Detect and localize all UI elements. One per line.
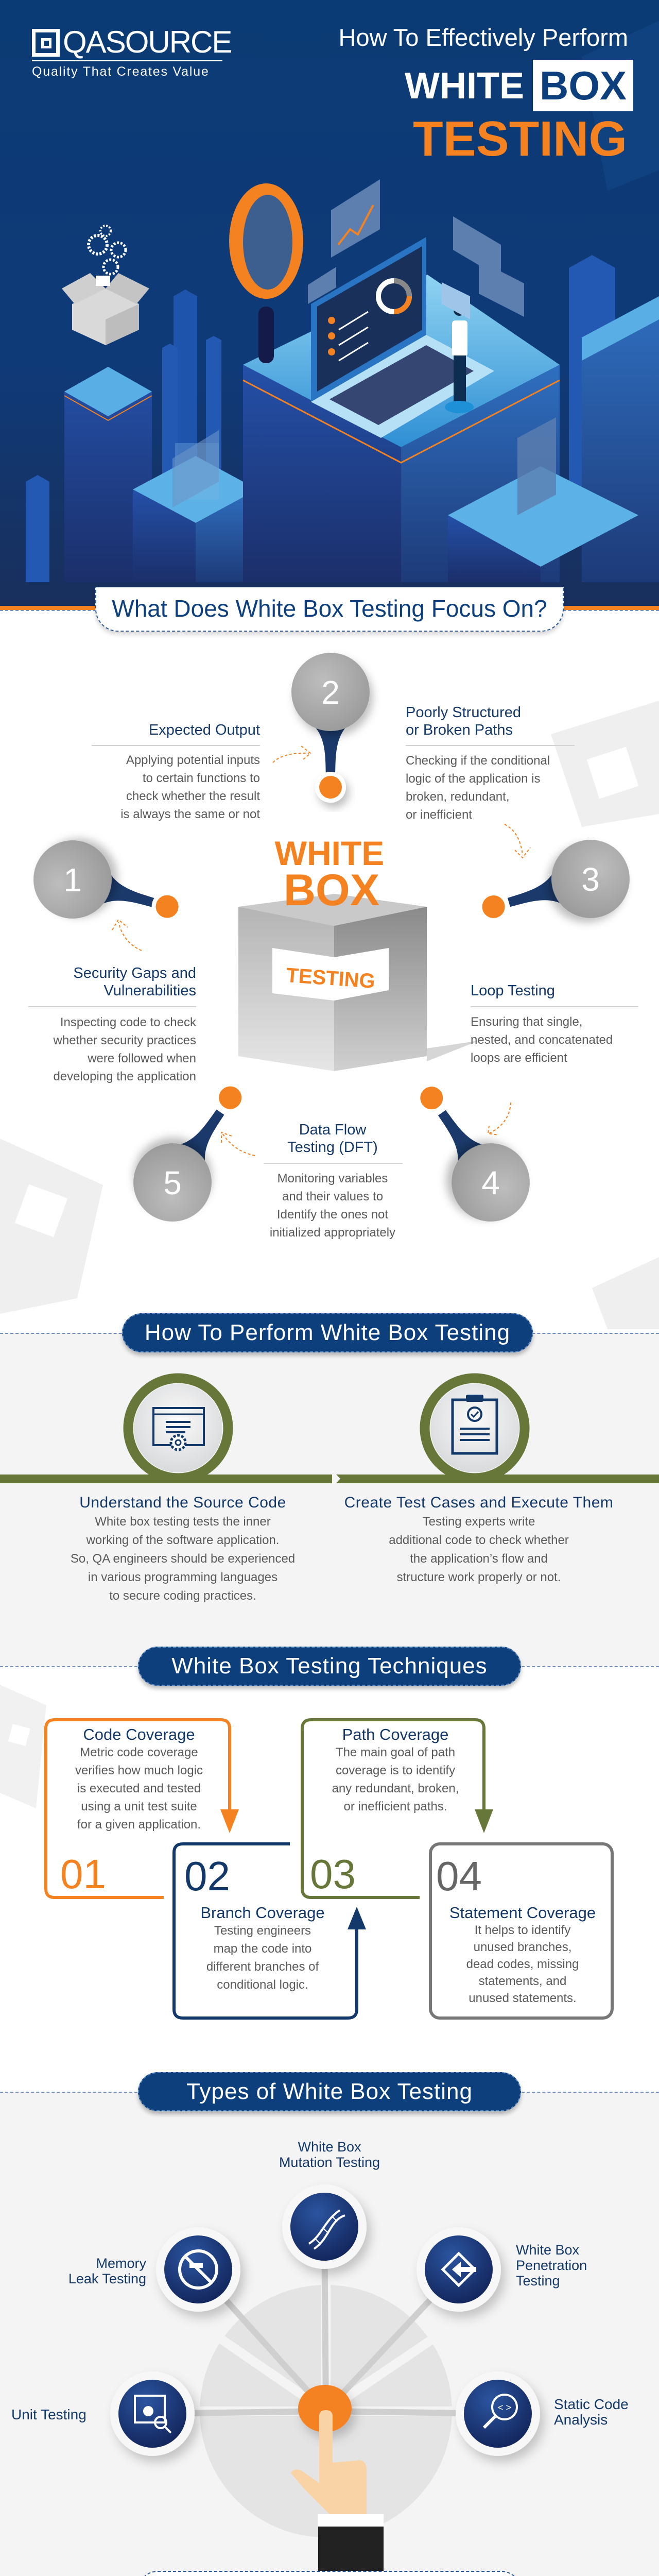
types background [0,2092,659,2576]
icon: memory leak [156,2227,240,2312]
text: Loop Testing: nested, and concatenated [471,1033,613,1047]
technique: Path Coverage: or inefficient paths. [343,1800,447,1814]
header banner [0,0,659,610]
text: Security Gaps: Inspecting code to check [60,1015,196,1029]
logo [32,25,231,79]
text: Data Flow Testing: and their values to [282,1190,383,1204]
watermarks [0,701,659,1329]
section: how to perform background [0,1333,659,1666]
text: Data Flow Testing: initialized appropriately [270,1226,395,1240]
text: Poorly Structured: broken, redundant, [406,790,509,804]
text: Loop Testing: loops are efficient [471,1051,567,1065]
text: Security Gaps [28,965,196,1083]
dashed arrows [112,746,530,1156]
technique: Path Coverage [310,1725,459,1897]
circle 4: 4 [481,1164,500,1201]
orange button with hand [291,2385,384,2573]
circle 1: 1 [63,861,82,899]
watermark left techniques [0,1685,46,1808]
technique: Path Coverage: Path Coverage [342,1725,448,1743]
technique: Code Coverage: Code Coverage [83,1725,195,1743]
label: penetration: Penetration [516,2258,587,2273]
text: Security Gaps: Security Gaps and [73,965,196,981]
text: Expected Output: to certain functions to [143,771,260,785]
technique: Branch Coverage: different branches of [206,1960,319,1974]
technique: Code Coverage: is executed and tested [77,1782,201,1795]
text: Expected Output [92,722,260,821]
title: BOX [540,63,627,108]
text: Loop Testing [471,982,638,1065]
title: WHITE [405,65,524,107]
text: Loop Testing: Loop Testing [471,982,555,999]
pill: How To Perform White Box Testing [122,1313,533,1352]
text: Expected Output: Applying potential inputs [126,753,260,767]
text: structure work properly or not. [397,1570,561,1584]
step: Understand the Source Code: Understand the Source Code [79,1494,286,1511]
technique: Code Coverage: verifies how much logic [75,1764,203,1777]
title: How To Effectively Perform [339,24,628,51]
step: Create Test Cases: Testing experts write [423,1515,535,1529]
circle 3 [468,831,639,948]
circle 5 [118,1063,271,1237]
cube: TESTING [285,964,376,993]
technique: Statement Coverage: 04 [436,1853,482,1899]
technique: Code Coverage [60,1725,203,1897]
technique: Code Coverage: 01 [60,1851,106,1897]
icon: penetration [417,2227,501,2312]
text: Data Flow Testing: Identify the ones not [277,1208,388,1222]
step: Create Test Cases: the application’s flow and [410,1552,548,1566]
label: mutation [279,2139,380,2170]
technique: Branch Coverage: conditional logic. [217,1978,308,1992]
technique: Path Coverage: any redundant, broken, [332,1782,459,1795]
technique: Statement Coverage: unused branches, [474,1940,571,1954]
label: penetration: Testing [516,2273,560,2289]
label: memory leak: Leak Testing [68,2271,146,2286]
label: static code: Analysis [554,2412,608,2428]
text: Expected Output: Expected Output [149,722,260,738]
title: TESTING [413,111,627,166]
step: Create Test Cases [344,1494,613,1584]
text: Poorly Structured: or inefficient [406,808,472,822]
pill: White Box Testing Tools [138,2571,521,2576]
text: Data Flow Testing: Monitoring variables [278,1172,388,1185]
step: Understand the Source Code: to secure coding practices. [109,1589,256,1603]
technique: Statement Coverage: It helps to identify [475,1923,570,1937]
pill: How To Perform White Box Testing: How To Perform White Box Testing [145,1320,510,1345]
text: Security Gaps: Vulnerabilities [104,982,196,999]
technique: Statement Coverage: statements, and [479,1974,566,1988]
technique: Path Coverage: The main goal of path [336,1745,455,1759]
circle 5: 5 [163,1164,182,1201]
logo: QASOURCE [63,25,231,59]
text: Poorly Structured: logic of the application is [406,772,541,786]
text: Poorly Structured: or Broken Paths [406,722,513,738]
icon: code window [128,1378,228,1478]
label: penetration [516,2242,587,2289]
cube: BOX [284,866,379,915]
label: mutation: White Box [298,2139,361,2155]
text: Poorly Structured: Poorly Structured [406,704,521,721]
step: Understand the Source Code: So, QA engineers should be experienced [71,1552,295,1566]
label: static code: Static Code [554,2396,629,2412]
text: Data Flow Testing: Testing (DFT) [287,1139,378,1156]
circle 2 [291,653,370,803]
text: Expected Output: is always the same or not [120,807,260,821]
pill: White Box Testing Techniques: White Box Testing Techniques [171,1653,488,1679]
step: Understand the Source Code: in various programming languages [88,1570,278,1584]
icon: static code analysis: < > [498,2402,511,2413]
circle 1 [24,831,193,948]
step: Create Test Cases: Create Test Cases and Execute Them [344,1494,613,1511]
pill: Types of White Box Testing: Types of White Box Testing [186,2079,473,2104]
technique: Statement Coverage: Statement Coverage [449,1904,596,1922]
technique: Path Coverage: coverage is to identify [336,1764,455,1777]
text: Data Flow Testing [264,1122,403,1240]
techniques flow [44,1718,614,2020]
logo: Quality That Creates Value [32,64,210,79]
focus diagram graphics [33,653,630,1223]
technique: Path Coverage: 03 [310,1851,356,1897]
technique: Branch Coverage: 02 [184,1853,230,1899]
text: Poorly Structured: Checking if the conditional [406,754,550,768]
technique: Code Coverage: Metric code coverage [80,1745,198,1759]
types diagram [110,2188,549,2571]
pill: What Does White Box Testing Focus On? [95,587,564,632]
how-to graphics [0,1374,659,1483]
cube: WHITE [275,834,384,872]
icon: clipboard [425,1378,525,1478]
icon: mutation DNA [282,2184,367,2269]
text: Security Gaps: developing the application [53,1070,196,1083]
circle 4 [391,1063,545,1237]
title [339,24,633,166]
icon: unit testing [110,2371,195,2456]
text: Loop Testing: Ensuring that single, [471,1015,582,1029]
technique: Code Coverage: using a unit test suite [81,1800,197,1814]
technique: Statement Coverage: unused statements. [469,1991,577,2005]
pill: What Does White Box Testing Focus On?: What Does White Box Testing Focus On? [112,595,547,622]
technique: Statement Coverage: dead codes, missing [466,1957,579,1971]
label: memory leak: Memory [96,2256,146,2271]
label: penetration: White Box [516,2242,579,2258]
icon: static code analysis [456,2371,540,2456]
text: Poorly Structured [406,704,575,822]
cube [238,834,479,1071]
circle 2: 2 [321,674,340,711]
label: unit testing: Unit Testing [11,2406,86,2422]
technique: Branch Coverage: map the code into [214,1942,311,1956]
label: mutation: Mutation Testing [279,2155,380,2170]
step: Create Test Cases: additional code to check whether [389,1533,569,1547]
technique: Branch Coverage [184,1853,325,1992]
step: Understand the Source Code: working of the software application. [86,1533,279,1547]
text: Security Gaps: whether security practices [54,1033,196,1047]
step: Understand the Source Code [71,1494,295,1603]
text: Data Flow Testing: Data Flow [299,1122,366,1138]
step: Understand the Source Code: White box testing tests the inner [95,1515,271,1529]
label: static code [554,2396,629,2428]
text: Expected Output: check whether the result [126,789,260,803]
technique: Statement Coverage [436,1853,596,2005]
pill: White Box Testing Techniques [138,1647,521,1686]
technique: Code Coverage: for a given application. [77,1818,201,1832]
label: memory leak [68,2256,146,2286]
pill: Types of White Box Testing [138,2072,521,2111]
text: Security Gaps: were followed when [88,1052,196,1065]
circle 3: 3 [581,861,600,898]
technique: Branch Coverage: Testing engineers [214,1924,311,1938]
technique: Branch Coverage: Branch Coverage [200,1904,325,1922]
